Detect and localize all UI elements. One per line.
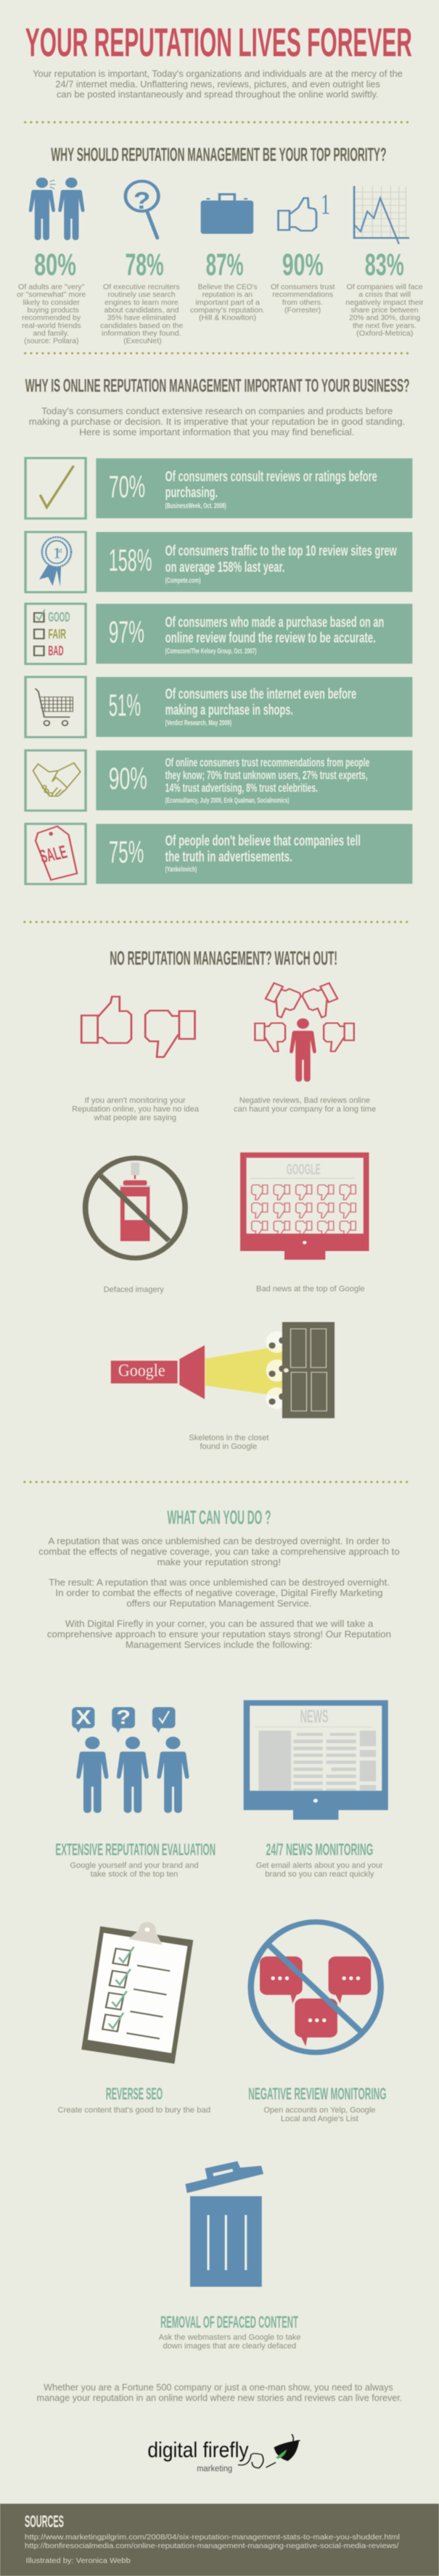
stat: 78%: 35% have eliminated: [107, 314, 176, 322]
row: 75% advertisements: the truth in advertisements.: [165, 848, 292, 865]
stat: 87%: [190, 246, 265, 322]
paragraph: research: Here is some important information that you may find beneficial.: [79, 426, 354, 437]
intro text: [33, 68, 403, 99]
caption: negative reviews: can haunt your company for a long time: [234, 1104, 377, 1113]
caption: not monitoring: what people are saying: [94, 1113, 176, 1122]
icon: magnifier: ?: [134, 186, 150, 214]
stat: 80%: Of adults are "very": [18, 283, 85, 291]
heading: reverse SEO: [57, 2085, 210, 2114]
icon: thumbs up with number one: 1: [321, 188, 330, 220]
stat: 80%: buying products: [27, 307, 79, 315]
icon: sale tag: [25, 824, 86, 884]
icon: good fair bad checklist: BAD: [48, 644, 64, 659]
stat: 87%: company's reputation.: [190, 307, 265, 315]
icon: briefcase: [201, 194, 253, 234]
paragraphs: what can you do: [38, 1536, 400, 1650]
stat: 78%: engines to learn more: [104, 299, 179, 307]
stat: 90%: recommendations: [272, 291, 334, 299]
footer: sources: SOURCES: [25, 2512, 64, 2531]
stat: 87%: 87%: [206, 246, 244, 282]
paragraphs: what can you do: The result: A reputation that was once unblemished can be destroyed overnight.: [49, 1577, 390, 1587]
stat: 80%: [17, 246, 86, 345]
icon: clipboard checklist: [81, 1922, 193, 2064]
row: 70% reviews: 70%: [109, 469, 145, 504]
icon: three people with speech bubbles: [72, 1706, 189, 1813]
stat: 78%: routinely use search: [108, 291, 176, 299]
text: WHAT CAN YOU DO ?: [167, 1507, 271, 1529]
icon: no spray paint: [86, 1158, 185, 1258]
stat: 83%: Of companies will face: [347, 283, 423, 291]
caption: negative reviews: Negative reviews, Bad reviews online: [239, 1095, 370, 1105]
caption: skeletons: [189, 1433, 269, 1451]
row: 90% trust: 14% trust advertising, 8% trust celebrities.: [165, 781, 318, 794]
stat: 90%: 90%: [282, 246, 324, 282]
icon: first place ribbon: 1: [53, 545, 61, 562]
stat: 90%: Of consumers trust: [271, 283, 335, 291]
stat: 80%: or "somewhat" more: [17, 291, 86, 299]
row: 158% traffic: 158%: [109, 543, 152, 578]
heading: reputation evaluation: Google yourself and your brand and: [70, 1861, 199, 1870]
closing text: [37, 2382, 402, 2403]
row: 70% reviews: [25, 458, 412, 518]
icon: check mark: [25, 458, 86, 518]
heading: reverse SEO: REVERSE SEO: [106, 2085, 163, 2103]
row: 158% traffic: (Compete.com): [165, 578, 201, 585]
stat: 78%: 78%: [125, 246, 164, 282]
caption: negative reviews: [234, 1095, 377, 1113]
row: 51% internet: [25, 677, 412, 737]
stat: 78%: about candidates, and: [104, 307, 179, 315]
caption: not monitoring: If you aren't monitoring your: [85, 1095, 186, 1105]
icon: monitor with bad Google results: [240, 1152, 369, 1260]
stat: 83%: the next five years.: [353, 322, 417, 330]
stat: 90%: (Forrester): [284, 307, 321, 315]
logo: digital firefly: [147, 2434, 300, 2473]
row: 70% reviews: (BusinessWeek, Oct. 2008): [165, 503, 226, 510]
icon: good fair bad checklist: GOOD: [48, 610, 70, 625]
heading: negative review monitoring: [248, 2085, 386, 2123]
heading: news monitoring: Get email alerts about you and your: [256, 1861, 383, 1870]
icon: falling line chart: [354, 186, 409, 244]
stat: 83%: 83%: [365, 246, 404, 282]
stat: 80%: likely to consider: [23, 299, 80, 307]
caption: skeletons: found in Google: [200, 1442, 258, 1451]
row: 158% traffic: on average 158% last year.: [165, 559, 284, 576]
footer: sources: Illustrated by: Veronica Webb: [25, 2557, 131, 2565]
paragraph: research: Today's consumers conduct extensive research on companies and products before: [41, 406, 393, 416]
logo: digital firefly: marketing: [197, 2463, 232, 2473]
icon: person surrounded by thumbs down: [255, 983, 354, 1081]
row: 90% trust: (Econsultancy, July 2009, Erik Qualman, Socialnomics): [165, 797, 290, 805]
footer: sources: http://bonfiresocialmedia.com/online-reputation-management-managing-negative-social-media-reviews/: [25, 2542, 399, 2550]
paragraphs: what can you do: offers our Reputation Management Service.: [126, 1597, 311, 1608]
stat: 83%: [345, 246, 424, 338]
icon: Google flashlight on closet door: Google: [118, 1360, 165, 1380]
row: 97% accurate: 97%: [109, 615, 144, 649]
icon: trash can: [185, 2161, 263, 2287]
heading: reverse SEO: Create content that's good to bury the bad: [57, 2105, 210, 2114]
stat: 87%: important part of a: [195, 299, 260, 307]
row: 75% advertisements: 75%: [109, 834, 144, 869]
icon: news monitor: NEWS: [300, 1706, 329, 1727]
icon: first place ribbon: st: [57, 547, 62, 554]
heading: removal of defaced content: down images that are clearly defaced: [163, 2341, 296, 2351]
caption: bad news: Bad news at the top of Google: [256, 1284, 365, 1293]
stat: 83%: negatively impact their: [345, 299, 424, 307]
icon: thumbs up with number one: [279, 188, 330, 230]
stat: 80%: recommended by: [22, 314, 81, 322]
row: 51% internet: (Verdict Research, May 2009): [165, 720, 231, 727]
paragraphs: what can you do: make your reputation strong!: [157, 1556, 281, 1567]
heading: removal of defaced content: [159, 2313, 301, 2351]
stat: 80%: real-world friends: [22, 322, 81, 330]
row: 90% trust: [25, 750, 412, 810]
stat: 80%: and family.: [33, 330, 69, 338]
stat: 78%: [100, 246, 183, 345]
stat: 83%: a crisis that will: [358, 291, 411, 299]
footer: sources: [0, 2504, 439, 2576]
row: 75% advertisements: (Yankelovich): [165, 866, 197, 873]
stat: 78%: Of executive recruiters: [103, 283, 180, 291]
caption: not monitoring: [72, 1095, 199, 1122]
paragraphs: what can you do: With Digital Firefly in your corner, you can be assured that we will take a: [65, 1619, 373, 1629]
heading: reputation evaluation: [55, 1840, 216, 1879]
icon: two people talking: [29, 178, 84, 240]
logo: digital firefly: digital firefly: [147, 2438, 249, 2461]
icon: good fair bad checklist: FAIR: [48, 627, 66, 642]
heading: negative review monitoring: Local and Angie's List: [281, 2114, 359, 2123]
row: 158% traffic: [25, 532, 412, 592]
icon: monitor with bad Google results: GOOGLE: [287, 1160, 321, 1178]
heading: news monitoring: brand so you can react quickly: [265, 1869, 374, 1879]
icon: good fair bad checklist: [25, 604, 86, 664]
icon: shopping cart: [25, 677, 86, 737]
row: 97% accurate: [25, 604, 412, 664]
heading: removal of defaced content: Ask the webmasters and Google to take: [159, 2332, 301, 2342]
stat: 78%: candidates based on the: [100, 322, 183, 330]
stat: 90%: [271, 246, 335, 315]
stat: 80%: 80%: [34, 246, 76, 282]
row: 97% accurate: (Comscore/The Kelsey Group, Oct. 2007): [165, 648, 256, 655]
stat: 87%: reputation is an: [202, 291, 253, 299]
icon: three people with speech bubbles: X: [75, 1706, 91, 1729]
icon: handshake: [25, 750, 86, 810]
stat: 83%: 20% and 30%, during: [349, 314, 420, 322]
paragraphs: what can you do: Management Services include the following:: [126, 1639, 313, 1650]
stat: 87%: Believe the CEO's: [198, 283, 258, 291]
icon: news monitor: [244, 1700, 388, 1820]
stat: 83%: share price between: [350, 307, 418, 315]
heading: negative review monitoring: Open accounts on Yelp, Google: [263, 2105, 376, 2114]
stat: 83%: (Oxford-Metrica): [356, 330, 414, 338]
row: 51% internet: 51%: [109, 687, 141, 723]
stat: 87%: (Hill & Knowlton): [199, 314, 256, 322]
icon: sale tag: SALE: [37, 841, 69, 867]
stat: 80%: (source: Pollara): [24, 337, 79, 345]
footer: sources: http://www.marketingpilgrim.com/2008/04/six-reputation-management-stats-to-make-you-shudder.html: [25, 2533, 400, 2541]
panel: top priority: [17, 144, 424, 345]
paragraph: research: [29, 406, 405, 437]
icon: thumbs up and down: [81, 997, 195, 1057]
caption: skeletons: Skeletons in the closet: [189, 1433, 269, 1442]
paragraph: research: making a purchase or decision. It is imperative that your reputation be in good standing.: [29, 416, 405, 427]
icon: no negative chat bubbles: [251, 1922, 381, 2053]
intro text: 24/7 internet media. Unflattering news, reviews, pictures, and even outright lies: [55, 78, 380, 89]
heading: reputation evaluation: take stock of the top ten: [91, 1869, 178, 1879]
row: 90% trust: 90%: [109, 761, 147, 796]
icon: three people with speech bubbles: ?: [116, 1706, 131, 1729]
paragraphs: what can you do: In order to combat the effects of negative coverage, Digital Firefly Marketing: [55, 1587, 382, 1598]
caption: defaced imagery: Defaced imagery: [104, 1284, 164, 1294]
caption: not monitoring: Reputation online, you have no idea: [72, 1104, 199, 1113]
icon: magnifier: [126, 181, 158, 238]
paragraphs: what can you do: A reputation that was once unblemished can be destroyed overnight. In order to: [48, 1536, 390, 1546]
heading: news monitoring: [256, 1840, 383, 1879]
text: EXTENSIVE REPUTATION EVALUATION: [55, 1840, 216, 1859]
icon: first place ribbon: [25, 532, 86, 592]
stat: 90%: from others.: [282, 299, 323, 307]
row: 75% advertisements: [25, 824, 412, 884]
stat: 78%: (ExecuNet): [123, 337, 162, 345]
intro text: can be posted instantaneously and spread throughout the online world swiftly.: [57, 89, 379, 99]
icon: Google flashlight on closet door: [111, 1322, 335, 1418]
stat: 78%: information they found.: [102, 330, 181, 338]
paragraphs: what can you do: combat the effects of negative coverage, you can take a comprehensive approach to: [38, 1546, 400, 1557]
row: 51% internet: making a purchase in shops.: [165, 701, 293, 718]
row: 70% reviews: purchasing.: [165, 484, 218, 501]
paragraphs: what can you do: comprehensive approach to ensure your reputation stays strong! Our Reputation: [47, 1629, 391, 1640]
